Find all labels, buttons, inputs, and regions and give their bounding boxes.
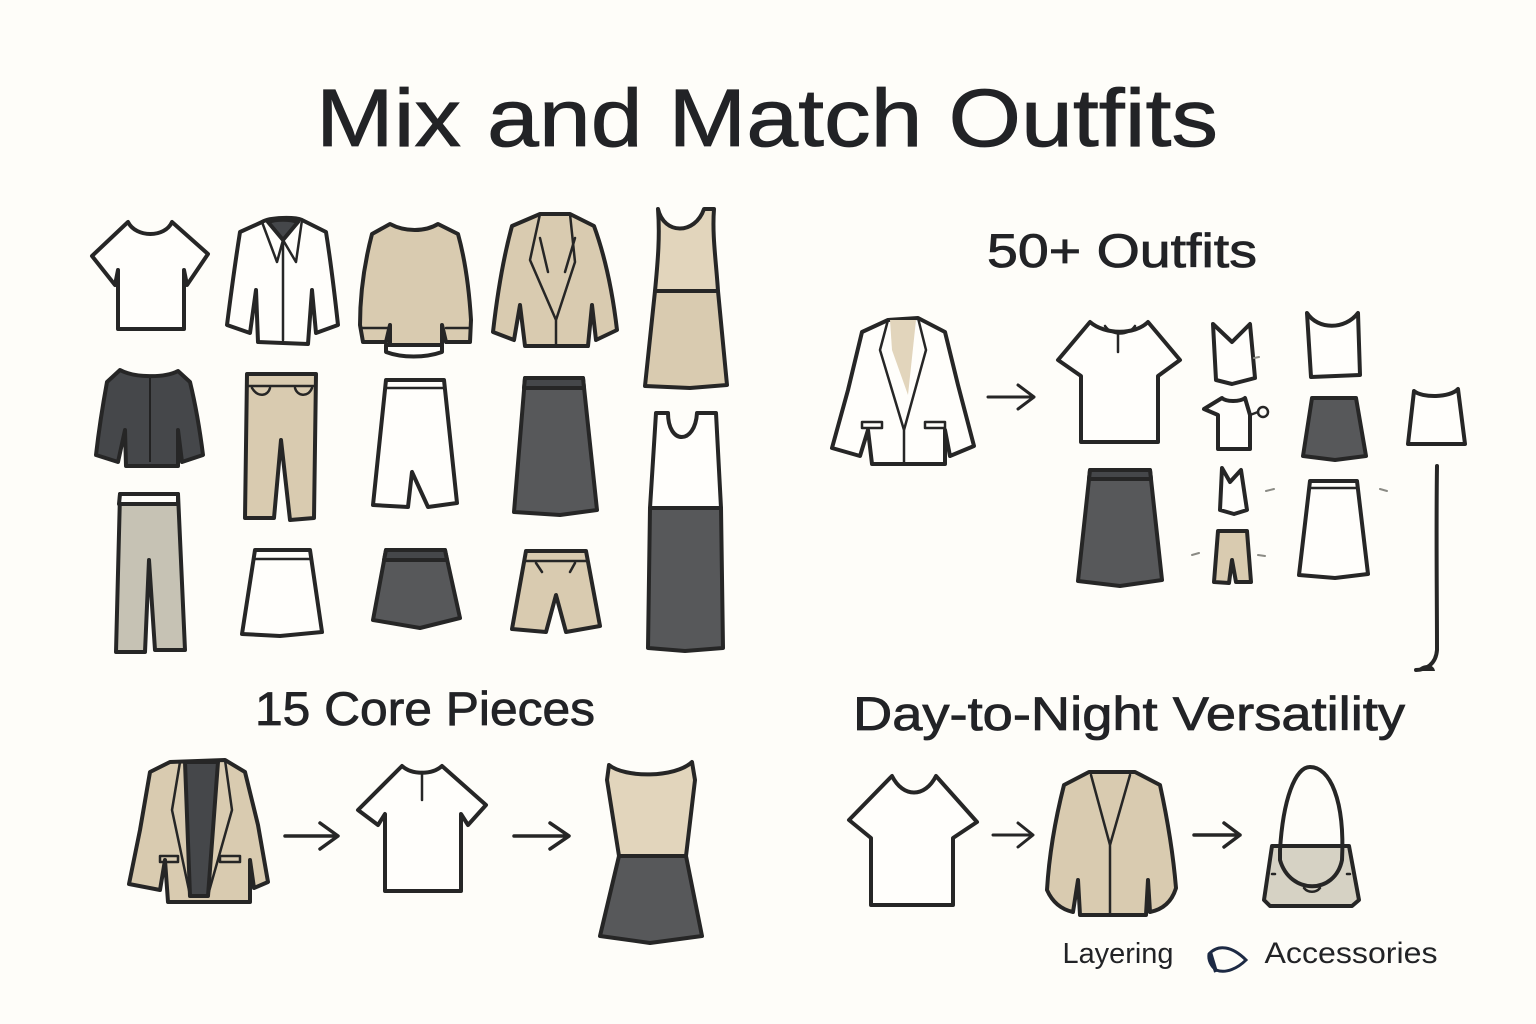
icon: accessories glyph xyxy=(1209,948,1246,972)
icon: white long skirt xyxy=(373,380,457,507)
icon: white midi skirt xyxy=(1299,481,1368,578)
arrow xyxy=(988,385,1034,409)
arrow: long down stroke xyxy=(1416,466,1437,671)
icon: dark flared skirt xyxy=(373,550,460,628)
icon: small tee with ornament xyxy=(1204,398,1268,449)
panel: 15 core pieces grid xyxy=(92,209,727,652)
label: accessories: Accessories xyxy=(1264,937,1438,970)
icon: white henley tee xyxy=(1058,322,1180,442)
panel: core pieces sequence xyxy=(129,760,702,943)
arrow xyxy=(514,823,569,849)
icon: white blazer xyxy=(832,318,974,464)
panel: day-to-night sequence xyxy=(849,767,1438,972)
icon: sleeveless top xyxy=(1408,389,1465,444)
icon: beige blazer xyxy=(493,214,617,346)
icon: small white top xyxy=(1213,324,1255,384)
icon: two-tone dress xyxy=(600,762,702,943)
heading: day-to-night versatility: Day-to-Night Versatility xyxy=(853,687,1406,740)
icon: white tank top xyxy=(1307,313,1360,377)
icon: beige shorts xyxy=(512,551,600,632)
icon: beige cardigan xyxy=(1047,772,1176,915)
icon: white mini skirt xyxy=(242,550,322,636)
arrow xyxy=(1194,823,1240,847)
icon: small beige shorts xyxy=(1214,531,1251,583)
heading: 15 core pieces: 15 Core Pieces xyxy=(255,682,595,735)
panel: 50+ outfits diagram xyxy=(832,313,1465,671)
icon: dark mini skirt xyxy=(1303,398,1366,460)
icon: beige dress xyxy=(645,209,727,388)
icon: grey trousers xyxy=(116,494,185,652)
icon: white shirt xyxy=(227,218,338,344)
icon: white blouse xyxy=(358,766,486,891)
icon: white t-shirt xyxy=(92,222,208,329)
icon: small tank xyxy=(1220,468,1247,514)
icon: handbag xyxy=(1264,767,1359,906)
icon: beige trousers xyxy=(245,374,316,520)
icon: beige blazer with dark top xyxy=(129,760,268,902)
arrow xyxy=(285,823,338,849)
heading: 50+ outfits: 50+ Outfits xyxy=(987,224,1257,277)
icon: dark midi skirt xyxy=(1078,470,1162,586)
title: Mix and Match Outfits xyxy=(316,73,1218,164)
icon: white t-shirt xyxy=(849,776,977,905)
icon: two-tone long dress xyxy=(648,413,723,651)
arrow xyxy=(993,823,1033,847)
icon: beige sweater xyxy=(360,224,471,356)
icon: dark knee skirt xyxy=(514,378,597,515)
label: layering: Layering xyxy=(1062,938,1174,970)
icon: dark cardigan xyxy=(96,370,203,466)
